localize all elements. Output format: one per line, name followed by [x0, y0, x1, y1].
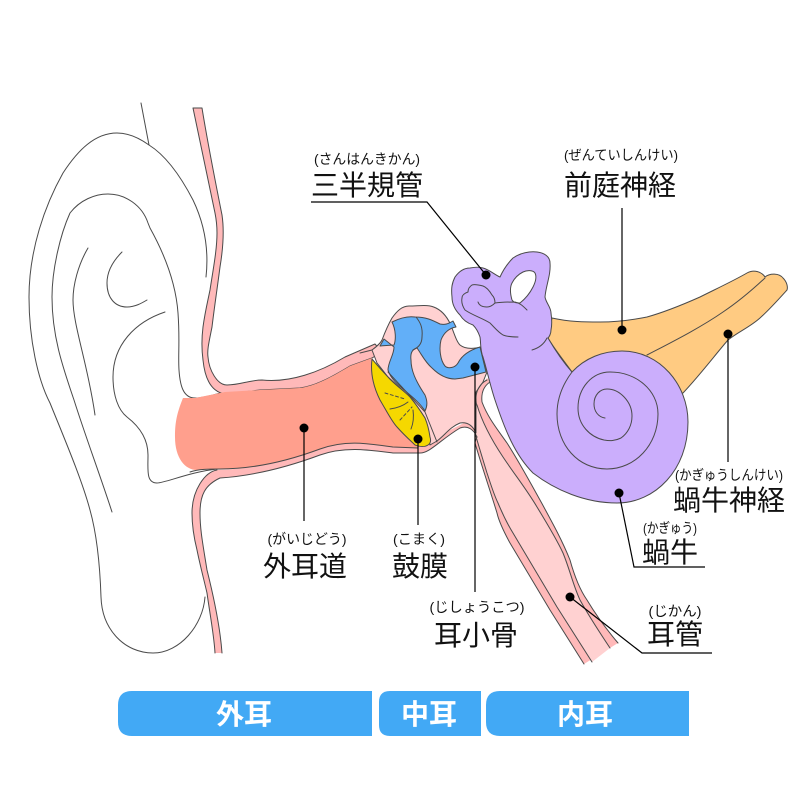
leader: 蝸牛 [614, 488, 705, 567]
leader: 三半規管 [311, 202, 490, 280]
eustachian tube interior [474, 392, 610, 662]
label: 三半規管: 三半規管 [311, 170, 423, 201]
label: 蝸牛神経 [673, 467, 785, 516]
ossicles [380, 317, 486, 411]
label: 外耳道: 外耳道 [263, 551, 347, 582]
leader: 耳小骨 [470, 362, 480, 592]
leader: 外耳道 [300, 424, 308, 521]
ear canal outlines [190, 350, 477, 653]
band: 外耳: 外耳 [216, 699, 272, 730]
label: 蝸牛: 蝸牛 [642, 537, 698, 568]
eustachian tube wall [474, 378, 618, 664]
label: 前庭神経: (ぜんていしんけい) [564, 147, 678, 163]
label: 蝸牛神経: 蝸牛神経 [673, 485, 785, 516]
eustachian tube outlines [475, 380, 618, 664]
label: 外耳道: (がいじどう) [268, 531, 346, 547]
label: 鼓膜: (こまく) [393, 531, 445, 547]
band: 中耳 [379, 691, 481, 736]
label: 蝸牛神経: (かぎゅうしんけい) [675, 467, 783, 483]
band: 内耳 [486, 691, 689, 736]
label: 耳小骨 [430, 599, 524, 651]
label: 鼓膜: 鼓膜 [392, 551, 448, 582]
label: 耳管 [647, 603, 703, 650]
leader: 鼓膜 [414, 434, 422, 525]
label: 耳管: (じかん) [648, 603, 702, 619]
outer ear (pinna) [29, 103, 225, 653]
label: 耳管: 耳管 [647, 619, 703, 650]
leader: 蝸牛神経 [724, 330, 732, 462]
ear canal [175, 358, 418, 470]
label: 三半規管: (さんはんきかん) [314, 151, 420, 167]
label: 鼓膜 [392, 531, 448, 582]
label: 前庭神経: 前庭神経 [564, 170, 676, 201]
label: 耳小骨: 耳小骨 [434, 620, 518, 651]
label: 前庭神経 [564, 147, 678, 201]
eardrum [371, 359, 431, 446]
semicircular canals and cochlea [452, 252, 688, 503]
label: 三半規管 [311, 151, 423, 201]
leader: 耳管 [566, 592, 712, 653]
label: 耳小骨: (じしょうこつ) [430, 599, 524, 615]
band: 中耳: 中耳 [401, 699, 457, 730]
label: 蝸牛 [642, 520, 698, 568]
vestibular and cochlear nerve [548, 271, 787, 400]
leader: 前庭神経 [618, 208, 626, 334]
band: 外耳 [118, 691, 372, 736]
skin band above the ear canal [193, 108, 382, 394]
label: 外耳道 [263, 531, 347, 582]
band: 内耳: 内耳 [557, 699, 613, 730]
middle ear cavity [372, 306, 487, 445]
skin band below the ear canal [192, 420, 477, 653]
label: 蝸牛: (かぎゅう) [643, 520, 697, 536]
